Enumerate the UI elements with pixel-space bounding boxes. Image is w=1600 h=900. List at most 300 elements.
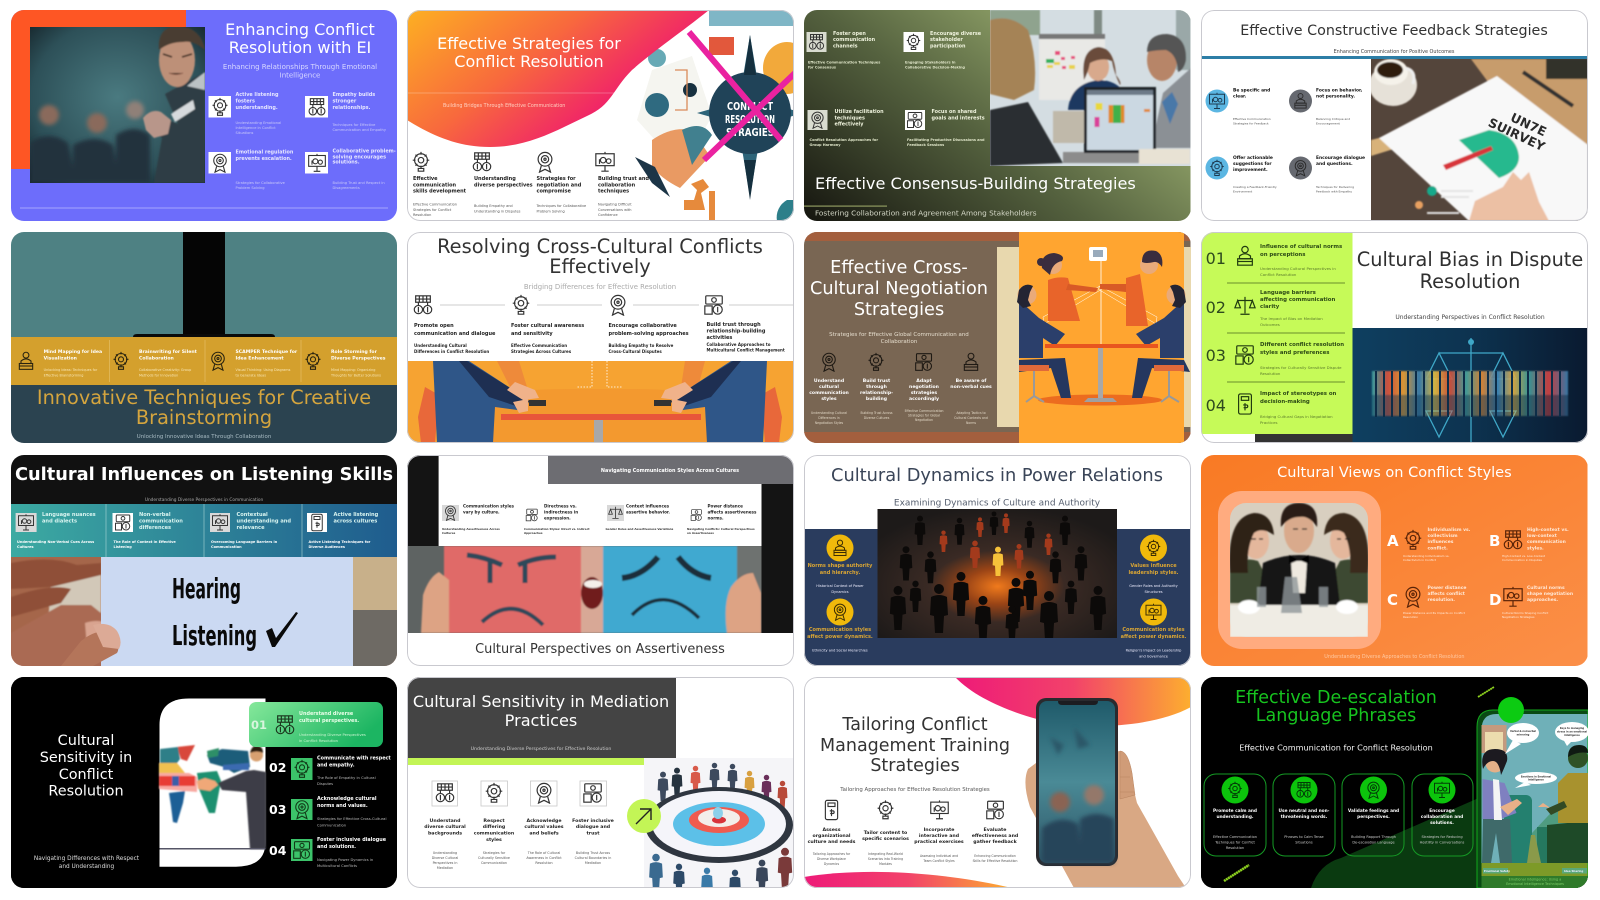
item texts: solutions. [332, 160, 359, 166]
item texts: low-context [1527, 533, 1558, 539]
item texts [425, 818, 614, 870]
item texts: stakeholder [930, 37, 964, 43]
item texts: and empathy. [316, 762, 354, 768]
item texts: goals and interests [932, 115, 985, 121]
item texts: Visualization [43, 356, 76, 362]
title: Strategies [870, 756, 960, 776]
item texts: communication [809, 390, 849, 396]
item texts: Conversations with [598, 208, 632, 212]
item texts [316, 756, 391, 868]
item texts: understanding. [235, 105, 277, 111]
icon circles [1222, 776, 1456, 804]
item texts: Creating a Feedback-Friendly [1233, 185, 1277, 189]
title: Resolving Cross-Cultural Conflicts [437, 235, 763, 258]
item texts [235, 92, 395, 190]
item texts: Effective Communication [1213, 835, 1257, 839]
item texts: Communication styles [463, 503, 515, 508]
item texts: Understand [814, 378, 844, 384]
item texts: relationship-building [707, 329, 766, 335]
item texts: Communication [316, 824, 346, 828]
item texts: differing [483, 824, 506, 830]
item texts: Power distance [708, 503, 743, 508]
item texts: Context influences [626, 503, 670, 508]
item texts [807, 563, 1187, 658]
item texts: Multicultural Conflict Management [707, 348, 785, 353]
panel: Innovative Techniques for Creative Brainstorming [10, 232, 397, 443]
teal band: Contextual [236, 512, 268, 518]
panel: Cultural Sensitivity in Mediation Practices [407, 677, 794, 888]
panel: Resolving Cross-Cultural Conflicts Effectively [407, 232, 794, 443]
panel: Effective Cross-Cultural Negotiation Strategies [804, 232, 1191, 443]
photo: hearing vs listening note: Listening [172, 619, 256, 652]
item texts: communication [474, 830, 514, 836]
item texts: Impact of stereotypes on [1260, 391, 1337, 397]
item texts: Differences in Conflict Resolution [414, 349, 490, 354]
panel: Effective De-escalation Language Phrases [1201, 677, 1588, 888]
item texts: Respect [484, 818, 506, 824]
item texts: Mind Mapping for Idea [43, 349, 102, 355]
item texts: interactive and [919, 833, 959, 839]
letter markers: C [1387, 591, 1398, 609]
item texts: Situations [235, 131, 253, 135]
item texts: techniques [835, 115, 865, 121]
item texts: activities [707, 335, 733, 341]
item texts: Feedback with Empathy [1316, 190, 1352, 194]
item texts: Strategies for Effective Cross-Cultural [316, 817, 386, 821]
item texts: Brainwriting for Silent [138, 349, 197, 355]
subtitle: Intelligence [279, 72, 320, 80]
item texts: Understanding Cultural Perspectives in [1260, 266, 1336, 271]
item texts: Gender Roles and Authority [1129, 584, 1178, 588]
item texts: Resolution [1260, 371, 1281, 376]
item texts: Building Trust Across [576, 851, 611, 855]
item texts: Historical Context of Power [816, 584, 864, 588]
title: Cultural [57, 733, 114, 749]
item texts: Techniques for Collaborative [536, 204, 586, 208]
subtitle: and Understanding [58, 864, 114, 870]
illustration: negotiators at table [1017, 232, 1190, 443]
item texts: Cultural Contexts and [954, 416, 988, 420]
item texts: Build trust [863, 378, 891, 384]
item texts: Culturally Sensitive [478, 856, 510, 860]
item texts: participation [930, 44, 966, 50]
item texts: Diverse Cultural [432, 856, 459, 860]
letter markers: B [1489, 532, 1500, 550]
item texts: not personality. [1316, 94, 1355, 100]
panel: Tailoring Conflict Management Training Strategies [804, 677, 1191, 888]
subtitle: Enhancing Communication for Positive Outcomes [1334, 49, 1455, 55]
icon row [826, 800, 1004, 820]
item texts: solutions. [1430, 820, 1454, 826]
item texts: Collaborative problem- [332, 148, 395, 154]
title: Cultural Views on Conflict Styles [1277, 465, 1512, 481]
icons [19, 352, 320, 370]
item texts: Modules [879, 862, 892, 866]
title: Brainstorming [135, 406, 272, 429]
item texts: SCAMPER Technique for [235, 349, 297, 355]
item texts: Effective Communication [413, 202, 457, 206]
item texts: Understanding [433, 851, 457, 855]
item texts: suggestions for [1233, 161, 1272, 167]
item texts: Balancing Critique and [1316, 117, 1350, 121]
item texts: Building Trust and Respect in [332, 181, 384, 185]
teal band: Active Listening Techniques for [308, 540, 370, 544]
item texts: cultural values [525, 824, 564, 830]
item texts: affects assertiveness [708, 509, 757, 514]
item texts: Problem Solving [537, 210, 565, 214]
icon: active listening [208, 96, 230, 118]
illustration: conflict resolution compass: CONFLICT [727, 101, 774, 113]
item texts: Outcomes [1260, 322, 1280, 327]
item texts: Communication in Disputes [1502, 558, 1542, 562]
item texts: Strategies for Conflict [413, 208, 452, 212]
item texts: Active listening [235, 92, 278, 98]
item texts: Conflict Resolution Approaches for [810, 138, 879, 142]
item texts: Language barriers [1260, 290, 1316, 296]
title: Management Training [820, 736, 1010, 756]
illustration: two people in conversation: Emotions in Emotional [1521, 776, 1551, 778]
item texts: Ethnicity and Social Hierarchies [812, 648, 868, 652]
item texts: Foster inclusive [572, 818, 614, 824]
item texts: and solutions. [316, 844, 356, 850]
item texts: skills development [413, 188, 467, 194]
item texts: Problem Solving [235, 186, 264, 190]
item texts: Phrases to Calm Tense [1284, 835, 1324, 839]
item texts: cultural [819, 384, 840, 390]
illustration: negotiation table [407, 361, 794, 443]
item texts: Individualism vs. [1428, 527, 1471, 533]
item texts: Encourage dialogue [1316, 155, 1365, 161]
item texts: and sensitivity [511, 331, 554, 337]
item texts: Resolution [1403, 615, 1418, 619]
photo: angry and sad faces on painted cards [408, 546, 762, 633]
item texts: Encourage [1429, 808, 1455, 814]
item texts [808, 827, 1018, 866]
item texts: Mind Mapping: Organizing [330, 368, 375, 372]
item texts: communication [1527, 539, 1566, 545]
title: Effective De-escalation [1235, 688, 1437, 708]
item texts: Negotiation Styles [815, 421, 844, 425]
item texts: communication [413, 182, 457, 188]
title: Cultural Sensitivity in Mediation [413, 692, 669, 711]
item numbers: 03 [268, 802, 286, 817]
item texts: De-escalation Language [1352, 840, 1395, 844]
title: Cultural Influences on Listening Skills [14, 465, 393, 485]
panel: Cultural Influences on Listening Skills [10, 455, 397, 666]
item texts: Foster cultural awareness [511, 323, 585, 329]
title: Effective Strategies for [437, 34, 622, 53]
panel: Effective Constructive Feedback Strategies [1201, 10, 1588, 221]
item texts: for Consensus [808, 66, 836, 70]
item texts: The Role of Empathy in Cultural [316, 776, 375, 780]
item texts [808, 31, 985, 147]
icon: lime arrow circle [627, 799, 661, 833]
illustration: two people in conversation: stress in an emotional [1557, 730, 1587, 734]
item texts: Engaging Stakeholders in [905, 60, 956, 64]
item texts: Approaches [524, 531, 543, 535]
item texts: Diverse Cultures [864, 416, 890, 420]
item texts: Disputes [316, 782, 333, 786]
item texts: Understanding Individualism vs. [1403, 554, 1450, 558]
item texts: shape negotiation [1527, 591, 1573, 597]
subtitle: Understanding Diverse Perspectives in Communication [144, 497, 263, 503]
item texts: Collaboration [138, 356, 173, 362]
item numbers: 04 [268, 843, 286, 858]
icon boxes [432, 781, 607, 806]
panel: Effective Consensus-Building Strategies [804, 10, 1191, 221]
item texts: Assess [823, 827, 841, 833]
item texts: perspectives. [1357, 814, 1390, 820]
item texts: Integrating Real-World [868, 852, 903, 856]
icons [807, 32, 925, 130]
item texts: Situations [1295, 840, 1313, 844]
item texts: affect power dynamics. [807, 634, 873, 640]
item texts: specific scenarios [862, 836, 909, 842]
illustration: two people in conversation: Keys to managing [1560, 727, 1584, 730]
item texts: Building Trust Across [861, 411, 893, 415]
item texts: prevents escalation. [235, 156, 291, 162]
item texts: collaboration and [1421, 814, 1463, 820]
teal band [10, 504, 397, 557]
item texts: Enhancing Communication [974, 854, 1016, 858]
item texts [1259, 244, 1344, 425]
item texts: Negotiation Strategies [1502, 615, 1535, 619]
title: Language Phrases [1256, 706, 1416, 726]
title: Strategies [854, 300, 944, 320]
item texts: and hierarchy. [820, 570, 861, 576]
item texts: affects conflict [1428, 591, 1466, 597]
illustration: conflict resolution compass [635, 10, 811, 221]
item texts: Use neutral and non- [1279, 808, 1330, 814]
item texts: Cultural Norms Shaping Conflict [1502, 611, 1549, 615]
title: Resolution with EI [228, 38, 371, 57]
subtitle: Unlocking Innovative Ideas Through Collaboration [136, 434, 271, 440]
illustration: two people in conversation: Emotional Intelligence Techniques [1506, 882, 1564, 886]
icons [1235, 247, 1255, 414]
item texts: negotiation and [537, 182, 582, 188]
item texts: Evaluate [984, 827, 1007, 833]
item texts: Cultures [442, 531, 456, 535]
item texts: Dynamics [824, 862, 840, 866]
icon: empathy [304, 96, 328, 118]
item texts: practical exercises [914, 839, 964, 845]
item texts: Offer actionable [1233, 155, 1273, 161]
item texts: Building trust and [598, 176, 650, 182]
item texts: Encourage diverse [930, 31, 982, 37]
title: Effective Consensus-Building Strategies [815, 174, 1136, 193]
icon row [413, 152, 614, 172]
item texts: approaches. [1527, 597, 1558, 603]
illustration: two people in conversation: Emotional Safety [1484, 869, 1510, 873]
item texts: Effective Communication [1233, 117, 1271, 121]
item texts: Different conflict resolution [1260, 342, 1344, 348]
item texts: Visual Thinking: Using Diagrams [235, 368, 290, 372]
icon: emotional regulation [208, 152, 230, 174]
title: Practices [505, 711, 578, 730]
illustration: two people in conversation [1477, 697, 1589, 888]
item texts [1233, 88, 1365, 194]
subtitle: Navigating Differences with Respect [33, 856, 139, 862]
item texts: Resolution [413, 213, 432, 217]
item texts: Be specific and [1233, 88, 1270, 94]
item texts: Mediation [437, 866, 453, 870]
subtitle: Understanding Diverse Perspectives for Effective Resolution [471, 746, 612, 752]
panel: Cultural Views on Conflict Styles [1201, 455, 1588, 666]
item texts: styles. [1527, 545, 1544, 551]
illustration: circle of people around target [644, 758, 794, 900]
item texts: Effective [413, 176, 438, 182]
item texts: Understanding [474, 176, 517, 182]
item texts: Understanding Cultural [414, 343, 468, 348]
item texts: clear. [1233, 94, 1247, 100]
item texts: Understanding Cultural [811, 411, 847, 415]
item texts: solving encourages [332, 154, 386, 160]
teal band: Understanding Non-Verbal Cues Across [16, 540, 94, 544]
teal band: Cultures [16, 545, 33, 549]
header banner text: Navigating Communication Styles Across Cultures [601, 468, 739, 474]
item texts: Awareness in Conflict [527, 856, 563, 860]
item texts: conflict. [1428, 545, 1448, 551]
item texts: effectiveness and [972, 833, 1018, 839]
teal band: Non-verbal [138, 512, 170, 518]
item texts: on Assertiveness [687, 531, 715, 535]
item texts: affecting communication [1260, 297, 1335, 303]
item texts: Power distance [1428, 585, 1466, 591]
item texts: Strategies for Collaborative [235, 181, 285, 185]
item texts: Communication Styles: Direct vs. Indirect [524, 527, 591, 531]
item texts: threatening words. [1281, 814, 1328, 820]
cards outlines [1204, 774, 1473, 856]
panel: Enhancing Conflict Resolution with EI [10, 10, 397, 221]
item texts: gather feedback [973, 839, 1018, 845]
item texts: on perceptions [1260, 252, 1305, 258]
highlighted item 01: in Conflict Resolution [298, 739, 338, 743]
item texts: Skills for Effective Resolution [973, 859, 1018, 863]
item texts: Understanding Emotional [235, 121, 281, 125]
item texts: Tailor content to [864, 830, 908, 836]
item texts: Role Storming for [330, 349, 377, 355]
title: Resolution [1420, 270, 1520, 293]
illustration: two people in conversation: mirroring [1517, 734, 1530, 736]
photo: scale of justice over people [1352, 328, 1588, 443]
decorative black column [182, 232, 224, 334]
subtitle: Bridging Differences for Effective Resolution [524, 283, 676, 291]
item texts: Acknowledge cultural [316, 796, 376, 802]
illustration: two people in conversation: Emotional Intelligence: Using a [1509, 878, 1561, 882]
title: Conflict [58, 767, 113, 783]
letter markers: D [1489, 591, 1501, 609]
item texts: Feedback Sessions [907, 143, 944, 147]
item texts: Communication [481, 861, 507, 865]
item texts: Utilize facilitation [835, 109, 884, 115]
item texts: Strategies Across Cultures [511, 349, 572, 354]
teal band: across cultures [333, 518, 377, 524]
item texts: relationship- [860, 390, 893, 396]
photo: three people at table [1230, 503, 1368, 637]
teal band: Language nuances [42, 512, 95, 518]
item texts: Norms [966, 421, 977, 425]
highlighted item 01: Understanding Diverse Perspectives [298, 733, 365, 737]
item texts: Be aware of [956, 378, 988, 384]
item texts: collectivism [1428, 533, 1458, 539]
item texts: Navigating Power Dynamics in [316, 858, 373, 862]
icon boxes [290, 758, 312, 861]
item texts: Adapting Tactics to [957, 411, 986, 415]
item texts [43, 349, 385, 378]
teal band: differences [138, 525, 171, 531]
item texts: channels [833, 44, 858, 50]
highlighted item 01: Understand diverse [298, 711, 353, 717]
item texts: through [866, 384, 887, 390]
item texts: Understanding Assertiveness Across [442, 527, 500, 531]
item texts: Focus on behavior, [1316, 88, 1362, 94]
item texts: Techniques for Delivering [1315, 185, 1354, 189]
item texts: Bridging Cultural Gaps in Negotiation [1260, 414, 1333, 419]
item texts: relationships. [332, 105, 370, 111]
teal band: understanding and [236, 518, 291, 524]
title: Resolution [48, 784, 123, 800]
subtitle: Understanding Perspectives in Conflict Resolution [1395, 314, 1545, 321]
item texts: Collectivism in Conflict [1403, 558, 1437, 562]
illustration: two people in conversation: Idea Sharing [1564, 869, 1583, 873]
item texts: accordingly [909, 396, 939, 402]
photo: figure glowing in crowd [878, 509, 1117, 638]
item texts [1213, 808, 1465, 850]
item texts: Group Harmony [810, 143, 841, 147]
item texts: collaboration [598, 182, 636, 188]
highlighted item 01: 01 [250, 718, 267, 732]
teal band: relevance [236, 525, 265, 531]
item texts: Idea Enhancement [235, 356, 284, 362]
teal band: Communication [210, 545, 242, 549]
item texts: The Role of Cultural [527, 851, 561, 855]
item texts: Collaborative Approaches to [707, 342, 771, 347]
item texts: Promote open [414, 323, 454, 329]
item texts: understanding. [1216, 814, 1254, 820]
footer subtitle: Understanding Diverse Approaches to Conflict Resolution [1324, 654, 1465, 660]
item texts: influences [1428, 539, 1454, 545]
item texts: and beliefs [530, 830, 559, 836]
item texts: Navigating Conflicts: Cultural Perspectives [687, 527, 755, 531]
numbers: 03 [1206, 346, 1226, 365]
subtitle: Enhancing Relationships Through Emotional [222, 63, 377, 71]
item texts: decision-making [1260, 399, 1310, 405]
item texts: Understanding in Disputes [474, 210, 521, 214]
icon row [823, 353, 978, 371]
item texts: to Generate Ideas [235, 374, 266, 378]
teal band: Overcoming Language Barriers in [210, 540, 277, 544]
item texts: Adapt [916, 378, 933, 384]
item texts: Conflict Resolution [1260, 272, 1297, 277]
item texts: Diverse Workplace [817, 857, 846, 861]
item texts: Collaborative Decision-Making [905, 66, 966, 70]
item texts: Environment [1233, 190, 1253, 194]
item texts: vary by culture. [463, 509, 500, 514]
item texts: Communication styles [1123, 627, 1185, 633]
illustration: conflict resolution compass: STRAGIES [726, 127, 774, 139]
item texts: Hostility in Conversations [1420, 840, 1465, 844]
item texts: Techniques for Effective [331, 123, 376, 127]
item texts: stronger [332, 99, 356, 105]
item texts: Foster inclusive dialogue [316, 837, 386, 843]
subtitle: Strategies for Effective Global Communication and [829, 332, 969, 338]
title: Effective Cross- [830, 258, 968, 278]
item texts: Structures [1145, 590, 1163, 594]
item texts: organizational [813, 833, 851, 839]
item texts: backgrounds [428, 830, 463, 836]
item texts: High-context vs. [1527, 527, 1569, 533]
item texts: trust [587, 830, 601, 836]
